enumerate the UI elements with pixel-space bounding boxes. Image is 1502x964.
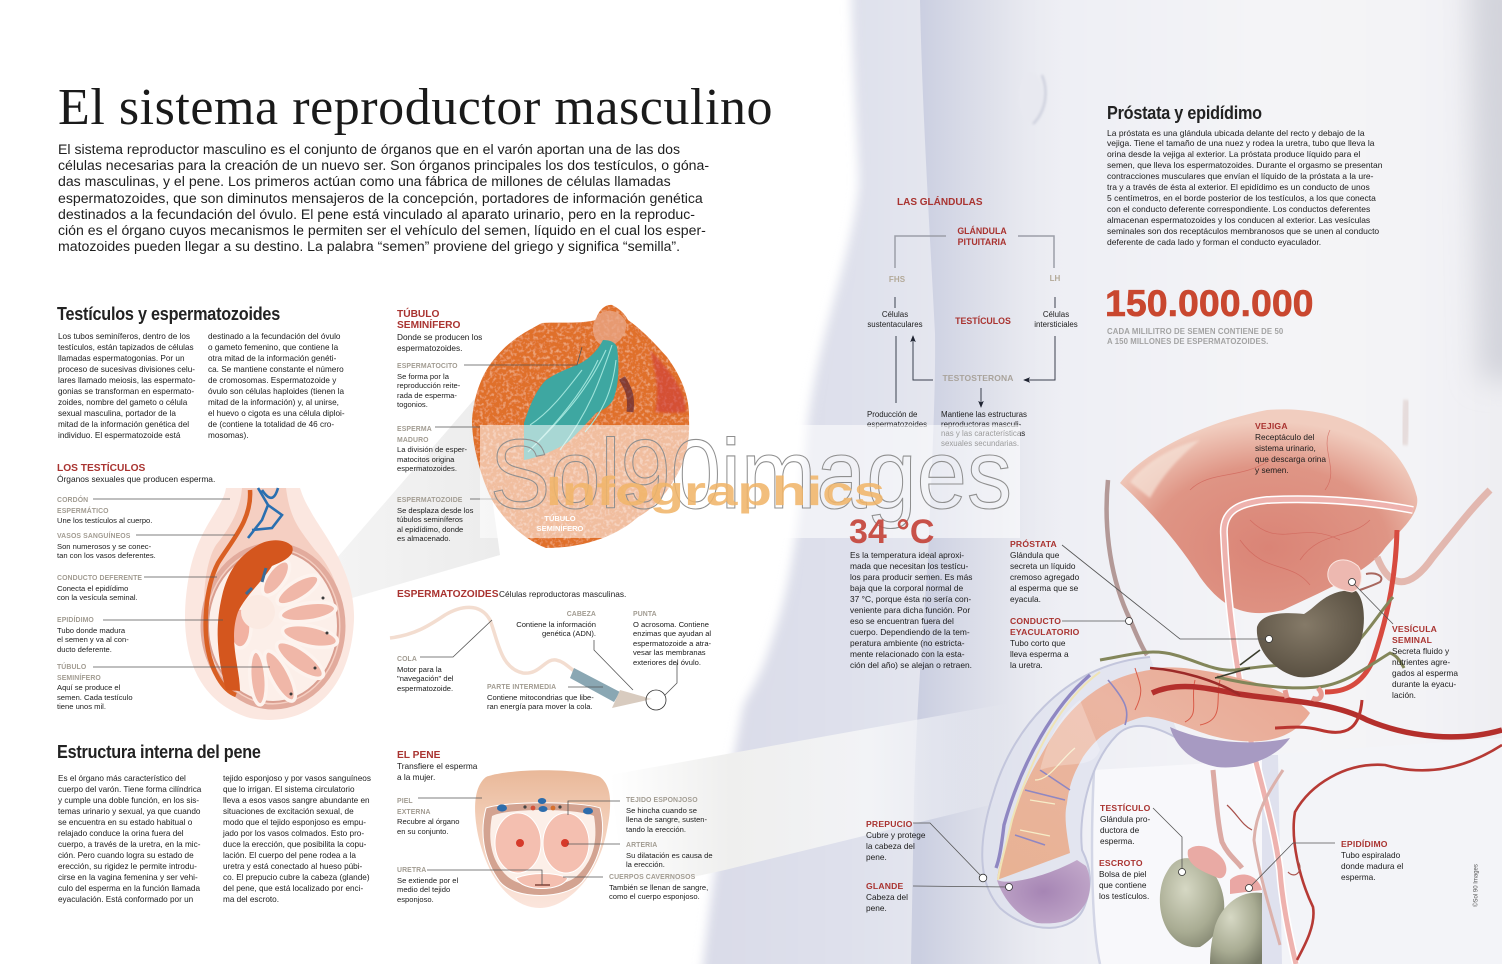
label: prepucio: PREPUCIO — [866, 818, 912, 828]
flow result: estructuras reproductoras: Mantiene las estructuras — [941, 410, 1027, 419]
label: punta: espermatozoide a atra- — [633, 638, 711, 648]
label: cordón espermático: CORDÓN — [57, 497, 88, 504]
label: cuerpos cavernosos: CUERPOS CAVERNOSOS — [609, 874, 695, 881]
text: próstata y epidídimo: vejiga. Tiene el tamaño de una nuez y rodea la uretra, tubo que lleva la — [1107, 138, 1374, 148]
label: epidídimo: EPIDÍDIMO — [57, 617, 94, 624]
heading: el pene: EL PENE — [397, 750, 440, 761]
text: pene column 1: cirse en la vagina femenina y ser vehi- — [58, 873, 198, 882]
label: esperma maduro: espermatozoides. — [397, 464, 457, 473]
text: próstata y epidídimo: deferente de cada lado y forman el conducto eyaculador. — [1107, 237, 1321, 247]
label: conducto eyaculatorio — [1010, 616, 1080, 670]
label: cabeza: CABEZA — [567, 611, 596, 618]
text: pene column 1: eyaculación. Está conformado por un — [58, 895, 193, 904]
label: vesícula seminal: nutrientes agre- — [1392, 656, 1450, 666]
label: espermatocito: ESPERMATOCITO — [397, 363, 458, 370]
label: testículo: TESTÍCULO — [1100, 802, 1150, 812]
label: parte intermedia — [487, 684, 594, 711]
text: pene column 2: situaciones de excitación sexual, de — [223, 807, 354, 816]
illustration: seminiferous tubule — [472, 305, 689, 548]
text: pene column 2: jado por los vasos colmados. Esto pro- — [223, 829, 364, 838]
text: testículos column 1: mitad de la información genética del — [58, 420, 189, 429]
flow node: células sustentaculares: Células — [882, 310, 908, 319]
label: escroto: Bolsa de piel — [1099, 868, 1147, 878]
label: cabeza — [516, 611, 596, 638]
label: vejiga — [1255, 420, 1326, 474]
label: túbulo seminífero: TÚBULO — [57, 664, 86, 671]
text: próstata y epidídimo: 5 centímetros, en el borde posterior de los testículos, a los que conecta — [1107, 193, 1376, 203]
text: pene column 1 — [58, 774, 202, 904]
label: parte intermedia: Contiene mitocondrias que libe- — [487, 692, 594, 702]
label: testículo — [1100, 802, 1150, 846]
label: cordón espermático: Une los testículos al cuerpo. — [57, 516, 152, 525]
label: testículo: ductora de — [1100, 824, 1139, 834]
label: esperma maduro: MADURO — [397, 436, 429, 444]
label: tejido esponjoso: llena de sangre, susten- — [626, 815, 707, 824]
text: pene column 2: tejido esponjoso y por vasos sanguíneos — [223, 774, 371, 783]
caption: 150.000.000: A 150 MILLONES DE ESPERMATOZOIDES. — [1107, 337, 1268, 346]
label: conducto deferente: con la vesícula seminal. — [57, 593, 138, 602]
label: parte intermedia: PARTE INTERMEDIA — [487, 684, 556, 691]
text: 34 °C: peratura ambiente (no estricta- — [850, 638, 965, 648]
text: próstata y epidídimo — [1107, 128, 1382, 247]
label: esperma maduro: La división de esper- — [397, 445, 467, 454]
label: espermatozoide: Se desplaza desde los — [397, 506, 473, 514]
label: uretra: URETRA — [397, 867, 426, 874]
label: vejiga: que descarga orina — [1255, 454, 1326, 464]
label: prepucio: la cabeza del — [866, 840, 915, 850]
flow node: FHS: FHS — [889, 275, 905, 284]
label: esperma maduro: ESPERMA — [397, 426, 432, 433]
text: testículos column 1: Los tubos seminíferos, dentro de los — [58, 332, 190, 341]
text: testículos column 2: de (contiene la totalidad de 46 cro- — [208, 420, 334, 429]
label: vesícula seminal: lación. — [1392, 690, 1416, 700]
heading: túbulo seminífero — [397, 308, 460, 331]
flow result: estructuras reproductoras: reproductoras masculi- — [941, 420, 1021, 428]
illustration: bladder — [1120, 409, 1417, 964]
text: pene column 2: que lo irrigan. El sistema circulatorio — [223, 785, 355, 794]
text: pene column 1: Es el órgano más característico del — [58, 774, 186, 783]
text: 34 °C: veniente para dicha función. Por — [850, 604, 970, 614]
watermark: TÚBULO — [544, 514, 576, 523]
flow result: estructuras reproductoras — [941, 410, 1027, 448]
flow node: glándula pituitaria: GLÁNDULA — [957, 226, 1007, 236]
text: el pene — [397, 761, 478, 782]
label: espermatocito — [397, 363, 460, 409]
urethra tube — [1224, 499, 1413, 964]
label: próstata: eyacula. — [1010, 594, 1041, 604]
label: glande — [866, 880, 908, 912]
label: punta: PUNTA — [633, 611, 657, 618]
label: próstata: al esperma que se — [1010, 582, 1078, 592]
label: túbulo seminífero: tiene unos mil. — [57, 702, 106, 711]
text: pene column 2: duce la erección, que posibilita la copu- — [223, 840, 366, 849]
intro paragraph: matozoides pueden llegar a su destino. La palabra “semen” proviene del griego y significa “semilla”. — [58, 238, 680, 254]
beam: testis to tubule — [330, 395, 500, 600]
credit: ©Sol 90 Images — [1474, 864, 1480, 907]
label: conducto deferente: Conecta el epidídimo — [57, 584, 128, 592]
text: pene column 1: erección, su rigidez le permite introdu- — [58, 862, 197, 871]
label: epidídimo: ducto deferente. — [57, 644, 112, 654]
label: piel externa: en su conjunto. — [397, 826, 449, 836]
label: túbulo seminífero: SEMINÍFERO — [57, 674, 101, 682]
title: El sistema reproductor masculino — [58, 78, 773, 136]
text: 34 °C: Es la temperatura ideal aproxi- — [850, 550, 964, 560]
label: tejido esponjoso: tando la erección. — [626, 824, 686, 834]
illustration: testis cross-section — [185, 488, 354, 720]
flow node: células intersticiales: intersticiales — [1034, 320, 1078, 328]
flow node: testosterona: TESTOSTERONA — [943, 373, 1013, 383]
label: vejiga: sistema urinario, — [1255, 442, 1316, 452]
label: cuerpos cavernosos: También se llenan de sangre, — [609, 882, 708, 892]
label: vesícula seminal — [1392, 624, 1458, 700]
label: piel externa — [397, 798, 460, 836]
flow node: células intersticiales: Células — [1043, 310, 1069, 319]
label: vasos sanguíneos: VASOS SANGUÍNEOS — [57, 533, 130, 540]
label: arteria: ARTERIA — [626, 842, 657, 849]
label: túbulo seminífero: Aquí se produce el — [57, 683, 120, 692]
watermark: SEMINÍFERO — [537, 524, 584, 533]
text: pene column 2: modo que el tejido esponjoso es empu- — [223, 818, 366, 827]
label: prepucio — [866, 818, 926, 862]
label: punta: enzimas que ayudan al — [633, 629, 711, 638]
subheading: espermatozoides: Células reproductoras masculinas. — [499, 589, 626, 599]
caption: 150.000.000: CADA MILILITRO DE SEMEN CONTIENE DE 50 — [1107, 327, 1283, 336]
label: vasos sanguíneos — [57, 532, 156, 560]
text: túbulo seminífero: Donde se producen los — [397, 332, 482, 342]
text: pene column 2 — [222, 774, 371, 904]
flow node: LH: LH — [1050, 274, 1060, 283]
label: cordón espermático: ESPERMÁTICO — [57, 508, 109, 514]
label: escroto: los testículos. — [1099, 890, 1149, 900]
subheading: los testículos: Órganos sexuales que producen esperma. — [57, 474, 215, 484]
text: pene column 1: relajado conduce la orina fuera del — [58, 829, 184, 838]
label: conducto eyaculatorio: EYACULATORIO — [1010, 626, 1080, 636]
text: pene column 1: temas urinario y sexual, ya que cuando — [58, 807, 200, 816]
label: uretra: Se extiende por el — [397, 876, 458, 884]
text: testículos column 2: otra mitad de la información genéti- — [208, 354, 336, 363]
text: el pene: Transfiere el esperma — [397, 761, 477, 771]
label: conducto eyaculatorio: CONDUCTO — [1010, 616, 1061, 626]
label: tejido esponjoso: Se hincha cuando se — [626, 806, 697, 814]
heading: próstata y epidídimo: Próstata y epidídimo — [1107, 103, 1262, 123]
label: epidídimo derecho: EPIDÍDIMO — [1341, 838, 1388, 848]
label: glande: Cabeza del — [866, 892, 908, 902]
label: vesícula seminal: VESÍCULA — [1392, 624, 1437, 634]
text: testículos column 2: ca. Se mantiene constante el número — [208, 365, 344, 374]
label: uretra: esponjoso. — [397, 894, 434, 904]
label: túbulo seminífero — [57, 662, 133, 711]
flow result: producción de espermatozoides: Producción de — [867, 410, 917, 419]
text: testículos column 2: mitad de la información) y, al unirse, — [208, 398, 339, 407]
label: cabeza: genética (ADN). — [542, 629, 596, 638]
flow node: glándula pituitaria: PITUITARIA — [958, 237, 1006, 247]
leader lines — [93, 347, 1393, 888]
text: testículos column 2: óvulo son células haploides (tienen la — [208, 387, 344, 396]
watermark: Infographics — [546, 468, 885, 514]
label: glande: pene. — [866, 902, 887, 912]
flow chart: las glándulas — [867, 196, 1078, 448]
text: testículos column 1: zoides, nombre del gameto o célula — [58, 398, 187, 407]
text: 34 °C — [850, 550, 972, 670]
label: vasos sanguíneos: Son numerosos y se conec- — [57, 542, 151, 550]
label: prepucio: pene. — [866, 852, 887, 862]
text: pene column 2: ma del escroto. — [223, 895, 279, 904]
text: túbulo seminífero: espermatozoides. — [397, 343, 462, 353]
label: cuerpos cavernosos: como el cuerpo esponjoso. — [609, 892, 700, 901]
label: arteria — [626, 842, 713, 869]
text: pene column 1: cuerpo, a través de la uretra, en la mic- — [58, 840, 200, 849]
label: vesícula seminal: gados al esperma — [1392, 668, 1458, 678]
label: esperma maduro: matocitos origina — [397, 454, 454, 464]
label: epidídimo: el semen y va al con- — [57, 635, 129, 644]
label: cuerpos cavernosos — [609, 874, 708, 901]
text: 34 °C: 37 °C, porque ésta no sería con- — [850, 594, 971, 604]
label: próstata: PRÓSTATA — [1010, 538, 1057, 548]
text: pene column 1: se encuentra en su estado habitual o — [58, 818, 192, 827]
flow node: células sustentaculares — [867, 310, 923, 328]
text: testículos column 1: llamadas espermatogonias. Por un — [58, 354, 185, 363]
label: epidídimo derecho — [1341, 838, 1403, 882]
illustration: penis cross-section — [475, 770, 610, 908]
label: epidídimo derecho: Tubo espiralado — [1341, 850, 1400, 860]
label: vesícula seminal: SEMINAL — [1392, 634, 1432, 644]
text: próstata y epidídimo: orina desde la vejiga al exterior. La próstata produce líquido para el — [1107, 149, 1360, 159]
illustration: spermatozoon — [390, 607, 666, 710]
text: 34 °C: cuerpo. Dependiendo de la tem- — [850, 626, 970, 636]
text: pene column 2: lación. El cuerpo del pene rodea a la — [223, 851, 356, 860]
text: testículos column 2 — [208, 332, 345, 440]
illustration: arteries, ducts and penis — [982, 400, 1502, 964]
text: testículos column 1: sexual masculina, portador de la — [58, 409, 176, 418]
label: parte intermedia: ran energía para mover la cola. — [487, 702, 593, 711]
label: vasos sanguíneos: tan con los vasos deferentes. — [57, 551, 156, 560]
text: pene column 2: co. El prepucio cubre la cabeza (glande) — [223, 873, 370, 882]
label: espermatocito: Se forma por la — [397, 372, 449, 380]
text: próstata y epidídimo: La próstata es una glándula ubicada delante del recto y debajo de la — [1107, 128, 1365, 138]
text: pene column 2: del pene, que está localizado por enci- — [223, 884, 363, 893]
label: piel externa: EXTERNA — [397, 808, 431, 816]
label: cola: espermatozoide. — [397, 684, 453, 692]
text: próstata y epidídimo: con el conducto deferente correspondiente. Los conductos deferentes — [1107, 204, 1370, 214]
label: punta: exteriores del óvulo. — [633, 658, 701, 666]
intro paragraph: El sistema reproductor masculino es el conjunto de órganos que en el varón aportan una de las dos — [58, 141, 680, 157]
flow node: glándula pituitaria — [957, 226, 1007, 247]
text: testículos column 1: gonias se transforman en espermato- — [58, 387, 194, 396]
label: testículo: Glándula pro- — [1100, 814, 1150, 824]
text: el pene: a la mujer. — [397, 772, 435, 782]
label: punta: O acrosoma. Contiene — [633, 620, 709, 628]
label: cabeza: Contiene la información — [516, 620, 596, 628]
flow result: estructuras reproductoras: nas y las características — [941, 429, 1025, 438]
label: arteria: la erección. — [626, 860, 665, 869]
text: pene column 2: lleva a esos vasos sangre abundante en — [223, 796, 370, 805]
flow node: células sustentaculares: sustentaculares — [867, 320, 923, 328]
flow node: testículos: TESTÍCULOS — [955, 316, 1011, 326]
text: testículos column 1 — [58, 332, 196, 440]
label: escroto: que contiene — [1099, 880, 1147, 890]
label: conducto eyaculatorio: lleva esperma a — [1010, 648, 1069, 658]
heading: testículos: Testículos y espermatozoides — [57, 304, 280, 324]
text: testículos column 2: de cromosomas. Espermatozoide y — [208, 376, 336, 385]
text: 34 °C: eso se encuentran fuera del — [850, 616, 954, 626]
label: vesícula seminal: Secreta fluido y — [1392, 646, 1449, 656]
label: cola — [397, 656, 453, 692]
label: testículo: esperma. — [1100, 836, 1135, 846]
seminal vesicle — [1328, 560, 1361, 592]
label: cordón espermático — [57, 495, 152, 525]
label: vejiga: VEJIGA — [1255, 420, 1288, 430]
beam: penis section to penis — [610, 703, 1010, 892]
label: escroto: ESCROTO — [1099, 858, 1143, 868]
testicles — [1160, 858, 1224, 947]
text: 34 °C: baja que la corporal normal de — [850, 582, 963, 592]
text: próstata y epidídimo: almacenan espermatozoides y los conducen al exterior. Las vesículas — [1107, 215, 1370, 225]
label: escroto — [1099, 858, 1149, 902]
text: 34 °C: los para producir semen. Es más — [850, 572, 972, 582]
text: testículos column 1: lares llamado meiosis, las espermato- — [58, 376, 195, 385]
text: túbulo seminífero — [397, 332, 482, 353]
label: vejiga: y semen. — [1255, 464, 1289, 474]
label: espermatocito: rada de esperma- — [397, 390, 457, 400]
label: piel externa: PIEL — [397, 798, 413, 805]
flow node: células intersticiales — [1034, 310, 1078, 328]
label: cola: "navegación" del — [397, 674, 453, 683]
lower vessels — [1294, 745, 1502, 960]
label: vesícula seminal: durante la eyacu- — [1392, 678, 1456, 688]
caption: 150.000.000 — [1107, 327, 1283, 346]
text: próstata y epidídimo: seminales son dos receptáculos membranosos que se unen al conducto — [1107, 226, 1379, 236]
text: pene column 2: uretra y está conectado al hueso púbi- — [223, 862, 362, 871]
label: epidídimo derecho: donde madura el — [1341, 860, 1403, 870]
heading: 34 °C: 34 °C — [849, 513, 934, 551]
label: cola: Motor para la — [397, 664, 442, 674]
text: testículos column 1: proceso de sucesivas divisiones celu- — [58, 365, 195, 374]
text: 34 °C: mada que necesitan los testícu- — [850, 560, 968, 570]
label: conducto deferente — [57, 575, 142, 602]
label: uretra — [397, 867, 458, 904]
intro paragraph: células necesarias para la creación de un nuevo ser. Son órganos principales los dos testículos, o góna- — [58, 157, 709, 173]
heading: túbulo seminífero: SEMINÍFERO — [397, 320, 460, 331]
label: espermatozoide: túbulos seminíferos — [397, 515, 463, 524]
flow result: producción de espermatozoides — [867, 410, 927, 428]
intro paragraph: destinados a la fecundación del óvulo. El pene está vinculado al aparato urinario, pero en la reproduc- — [58, 206, 695, 222]
flow result: estructuras reproductoras: sexuales secundarias. — [941, 438, 1019, 448]
heading: estructura del pene: Estructura interna del pene — [57, 742, 261, 762]
text: próstata y epidídimo: contracciones musculares que envían el líquido de la próstata a la ure- — [1107, 171, 1374, 181]
flow result: producción de espermatozoides: espermatozoides — [867, 420, 927, 428]
label: vejiga: Receptáculo del — [1255, 432, 1315, 442]
text: testículos column 2: o gameto femenino, que contiene la — [208, 343, 338, 352]
label: espermatozoide: al epidídimo, donde — [397, 524, 463, 534]
label: espermatocito: togonios. — [397, 400, 428, 409]
flow heading: LAS GLÁNDULAS — [897, 197, 983, 208]
body silhouette — [701, 0, 1502, 964]
text: pene column 1: culo del esperma en la función llamada — [58, 884, 200, 893]
label: punta — [633, 611, 711, 666]
label: uretra: medio del tejido — [397, 885, 450, 894]
label: conducto deferente: CONDUCTO DEFERENTE — [57, 575, 142, 582]
label: próstata: Glándula que — [1010, 550, 1059, 560]
heading: túbulo seminífero: TÚBULO — [397, 309, 439, 320]
label: prepucio: Cubre y protege — [866, 830, 926, 840]
text: testículos column 2: destinado a la fecundación del óvulo — [208, 332, 340, 341]
label: cola: COLA — [397, 656, 417, 663]
leader dots — [979, 578, 1356, 892]
text: testículos column 1: testículos, están tapizados de células — [58, 343, 194, 352]
label: epidídimo — [57, 616, 129, 654]
label: próstata — [1010, 538, 1079, 604]
text: próstata y epidídimo: tra y a través de ésta al exterior. El epidídimo es un conducto de unos — [1107, 182, 1370, 192]
text: pene column 1: y cumple una doble función, en los sis- — [58, 796, 199, 805]
text: pene column 1: cuerpo del varón. Tiene forma cilíndrica — [58, 785, 201, 794]
label: epidídimo derecho: esperma. — [1341, 872, 1376, 882]
text: 34 °C: ción del año) se alejan o retraen. — [850, 660, 972, 670]
label: esperma maduro — [397, 426, 467, 473]
label: punta: vesar las membranas — [633, 648, 706, 657]
heading: espermatozoides: ESPERMATOZOIDES — [397, 589, 499, 600]
label: glande: GLANDE — [866, 880, 903, 890]
heading: los testículos: LOS TESTÍCULOS — [57, 463, 145, 474]
label: próstata: cremoso agregado — [1010, 572, 1079, 582]
text: pene column 1: ción. Pero cuando logra su estado de — [58, 851, 194, 860]
intro paragraph: ción es el órgano cuyos mecanismos le permiten ser el vehículo del semen, líquido en el cual los esper- — [58, 222, 706, 238]
label: espermatocito: reproducción reite- — [397, 381, 460, 390]
big number: 150.000.000: 150.000.000 — [1105, 282, 1314, 324]
intro paragraph — [58, 141, 709, 254]
label: arteria: Su dilatación es causa de — [626, 850, 713, 860]
label: conducto eyaculatorio: la uretra. — [1010, 660, 1043, 670]
intro paragraph: das masculinas, y el pene. Los primeros actúan como una fábrica de millones de células llamadas — [58, 173, 671, 189]
hormone flow chart arrows — [895, 236, 1055, 407]
label: próstata: secreta un líquido — [1010, 560, 1076, 570]
label: espermatozoide: ESPERMATOZOIDE — [397, 497, 462, 504]
label: túbulo seminífero: semen. Cada testículo — [57, 692, 133, 702]
icon: navel — [1019, 72, 1045, 124]
intro paragraph: espermatozoides, que son diminutos mensajeros de la concepción, portadores de información genética — [58, 190, 703, 206]
label: conducto eyaculatorio: Tubo corto que — [1010, 638, 1066, 648]
label: piel externa: Recubre al órgano — [397, 817, 459, 826]
label: espermatozoide — [397, 497, 474, 543]
label: tejido esponjoso: TEJIDO ESPONJOSO — [626, 797, 698, 804]
text: testículos column 2: mosomas). — [208, 431, 248, 440]
prostate — [1257, 590, 1364, 677]
label: tejido esponjoso — [626, 797, 707, 834]
label: epidídimo: Tubo donde madura — [57, 626, 125, 634]
label: espermatozoide: es almacenado. — [397, 534, 451, 543]
text: testículos column 1: individuo. El espermatozoide está — [58, 431, 180, 440]
text: próstata y epidídimo: semen, que lleva los espermatozoides. Durante el orgasmo se presentan — [1107, 160, 1382, 170]
text: 34 °C: mente relacionado con la esta- — [850, 648, 965, 658]
text: testículos column 2: el huevo o cigota es una célula diploi- — [208, 409, 345, 418]
